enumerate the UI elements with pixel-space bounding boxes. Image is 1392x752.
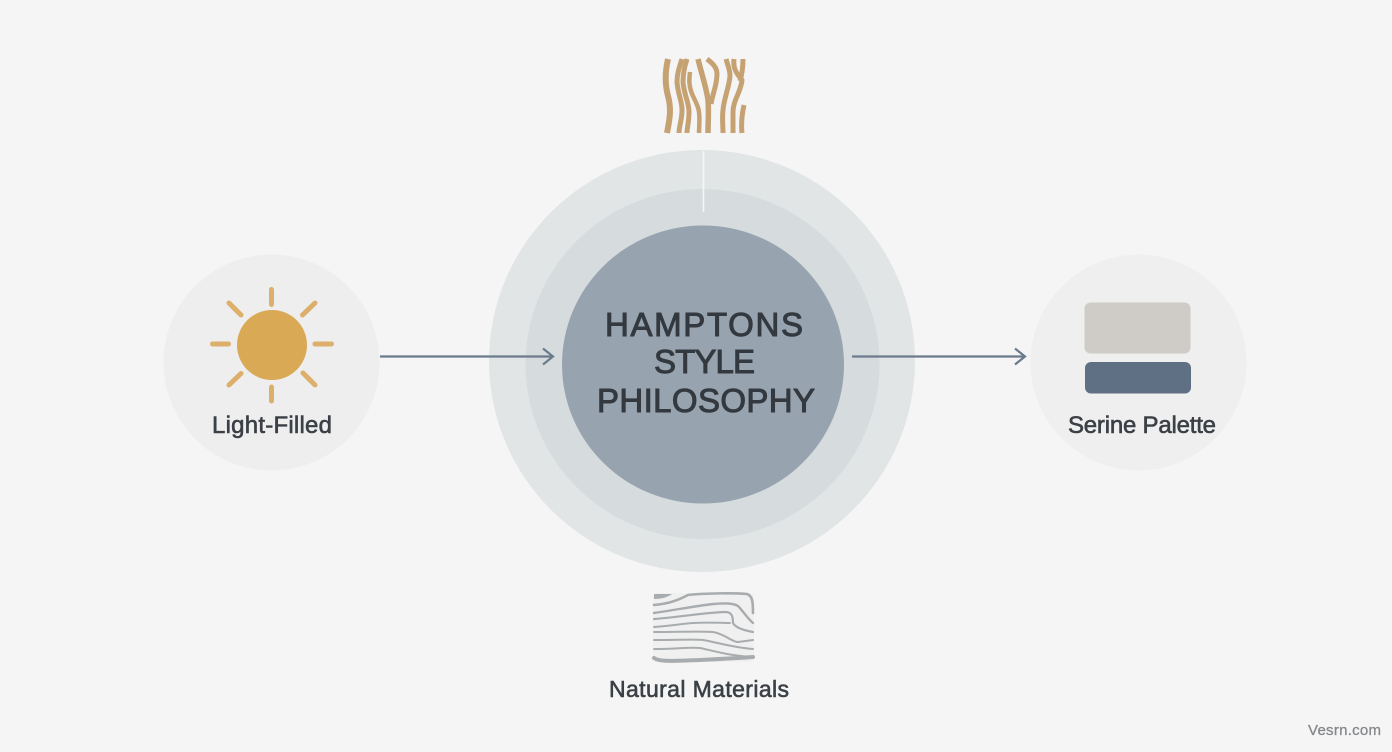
label: light-filled: Light-Filled xyxy=(212,412,332,439)
label: serine palette: Serine Palette xyxy=(1068,412,1216,439)
panel: serene palette xyxy=(1030,254,1246,470)
inner circle xyxy=(562,226,844,504)
divider line xyxy=(702,151,704,212)
outer ring xyxy=(489,150,915,572)
arrow: light-filled to centre xyxy=(380,348,553,364)
icon: sun xyxy=(212,290,332,401)
icon: stone veining xyxy=(653,593,754,662)
title: PHILOSOPHY xyxy=(597,382,815,419)
watermark: Vesrn.com xyxy=(1308,722,1381,739)
title xyxy=(597,306,815,419)
icon: wood grain xyxy=(666,59,744,133)
title: STYLE xyxy=(654,343,755,380)
arrow: centre to serine palette xyxy=(852,348,1025,364)
middle ring xyxy=(526,189,880,539)
label: natural materials: Natural Materials xyxy=(609,676,789,702)
title: HAMPTONS xyxy=(605,306,803,343)
panel: light-filled xyxy=(164,254,380,470)
icon: palette swatches xyxy=(1084,302,1191,394)
panel: natural materials xyxy=(609,593,789,702)
